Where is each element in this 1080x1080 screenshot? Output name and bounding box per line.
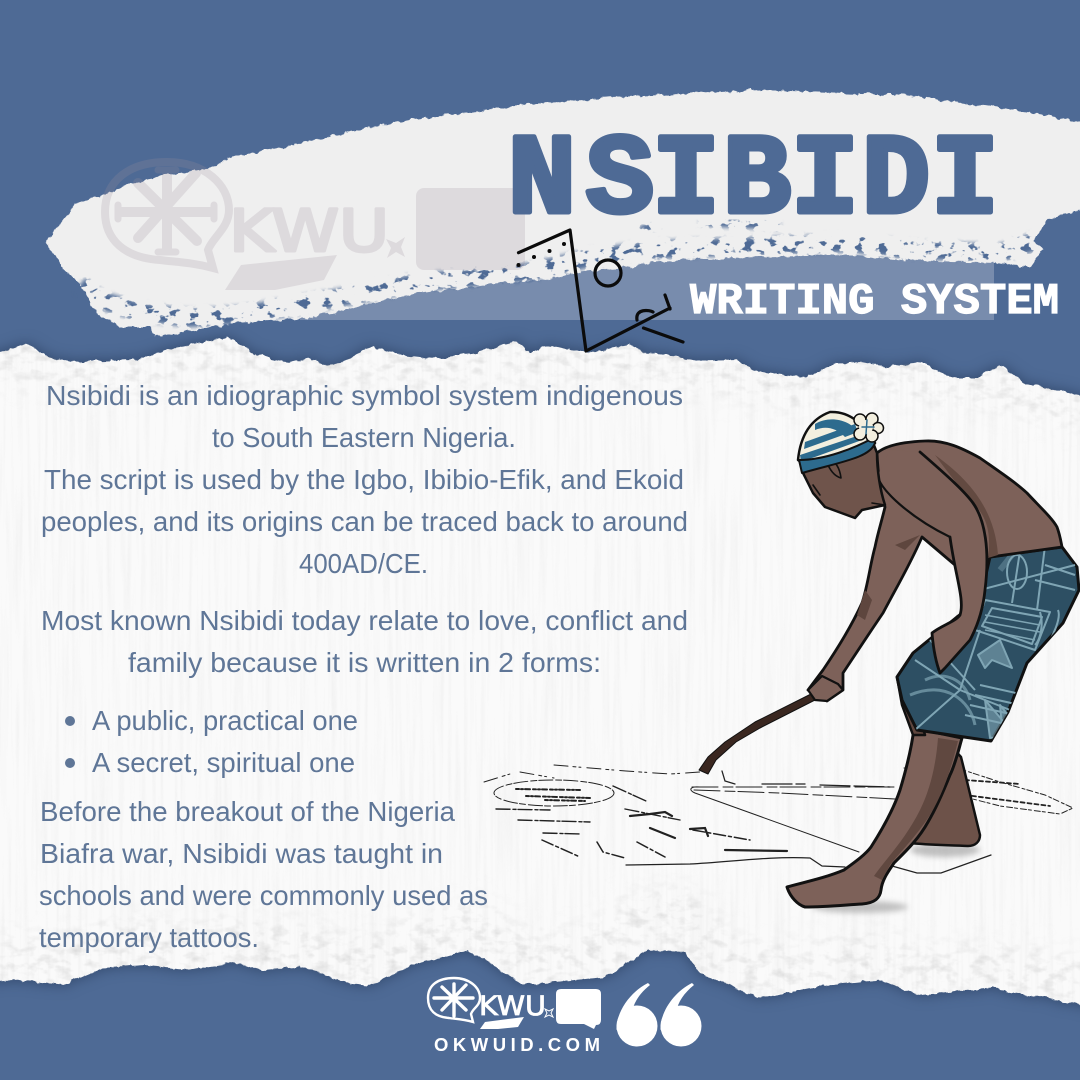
history paragraph: schools and were commonly used as	[39, 880, 488, 911]
history paragraph	[39, 796, 488, 953]
bullet list: A secret, spiritual one	[92, 747, 355, 778]
pompom knot	[854, 413, 884, 442]
footer speech bubble	[556, 989, 601, 1029]
watermark wheel emblem	[105, 162, 229, 268]
torn paper panel	[0, 330, 1080, 1020]
footer wheel emblem	[428, 978, 480, 1022]
footer logo	[428, 978, 702, 1055]
intro paragraph: peoples, and its origins can be traced back to around	[41, 506, 688, 537]
front leg	[787, 728, 962, 907]
watermark speech bubble	[416, 188, 525, 270]
headwrap	[798, 412, 884, 473]
footer logo letters: KWU	[479, 991, 546, 1022]
leg shading	[874, 738, 958, 880]
translucent band behind subtitle	[300, 240, 994, 320]
forms paragraph: Most known Nsibidi today relate to love, conflict and	[41, 605, 688, 636]
history paragraph: Biafra war, Nsibidi was taught in	[40, 838, 443, 869]
stick	[699, 693, 815, 774]
footer star	[545, 1009, 553, 1017]
hand on stick	[808, 676, 843, 701]
history paragraph: Before the breakout of the Nigeria	[40, 796, 455, 827]
intro paragraph: The script is used by the Igbo, Ibibio-Efik, and Ekoid	[44, 464, 684, 495]
back leg	[910, 745, 980, 846]
footer swoosh	[480, 1017, 524, 1029]
ground drawing of nsibidi symbols	[484, 765, 1073, 873]
far arm shading	[857, 535, 920, 620]
shorts	[897, 546, 1079, 741]
symbol: nsibidi glyph	[516, 230, 683, 351]
subtitle: WRITING SYSTEM	[690, 277, 1059, 327]
eye and mouth	[813, 485, 885, 505]
watermark star	[386, 237, 405, 258]
bullet list: A public, practical one	[92, 705, 358, 736]
foot shadows	[812, 843, 980, 913]
head	[803, 440, 885, 518]
forms paragraph: family because it is written in 2 forms:	[128, 647, 601, 678]
behind knee	[897, 665, 925, 735]
back shading	[935, 455, 998, 558]
watermark swoosh	[225, 255, 337, 290]
website: OKWUID.COM	[434, 1034, 600, 1055]
intro paragraph: Nsibidi is an idiographic symbol system indigenous	[46, 380, 683, 411]
bullet list	[65, 705, 358, 778]
torso and far arm	[808, 441, 1062, 701]
illustration: man writing with a stick	[699, 412, 1079, 913]
ear	[826, 461, 841, 478]
brush stroke banner	[46, 88, 1080, 337]
intro paragraph	[41, 380, 688, 579]
forms paragraph	[41, 605, 688, 678]
watermark logo	[105, 162, 525, 290]
intro paragraph: to South Eastern Nigeria.	[212, 422, 516, 453]
intro paragraph: 400AD/CE.	[299, 548, 428, 579]
watermark logo letters: KWU	[229, 197, 389, 265]
title: NSIBIDI	[508, 118, 999, 247]
history paragraph: temporary tattoos.	[39, 922, 259, 953]
icon: quotation marks	[616, 983, 702, 1046]
body text	[39, 380, 688, 953]
brush speckles	[78, 220, 1034, 330]
near arm	[878, 450, 987, 673]
